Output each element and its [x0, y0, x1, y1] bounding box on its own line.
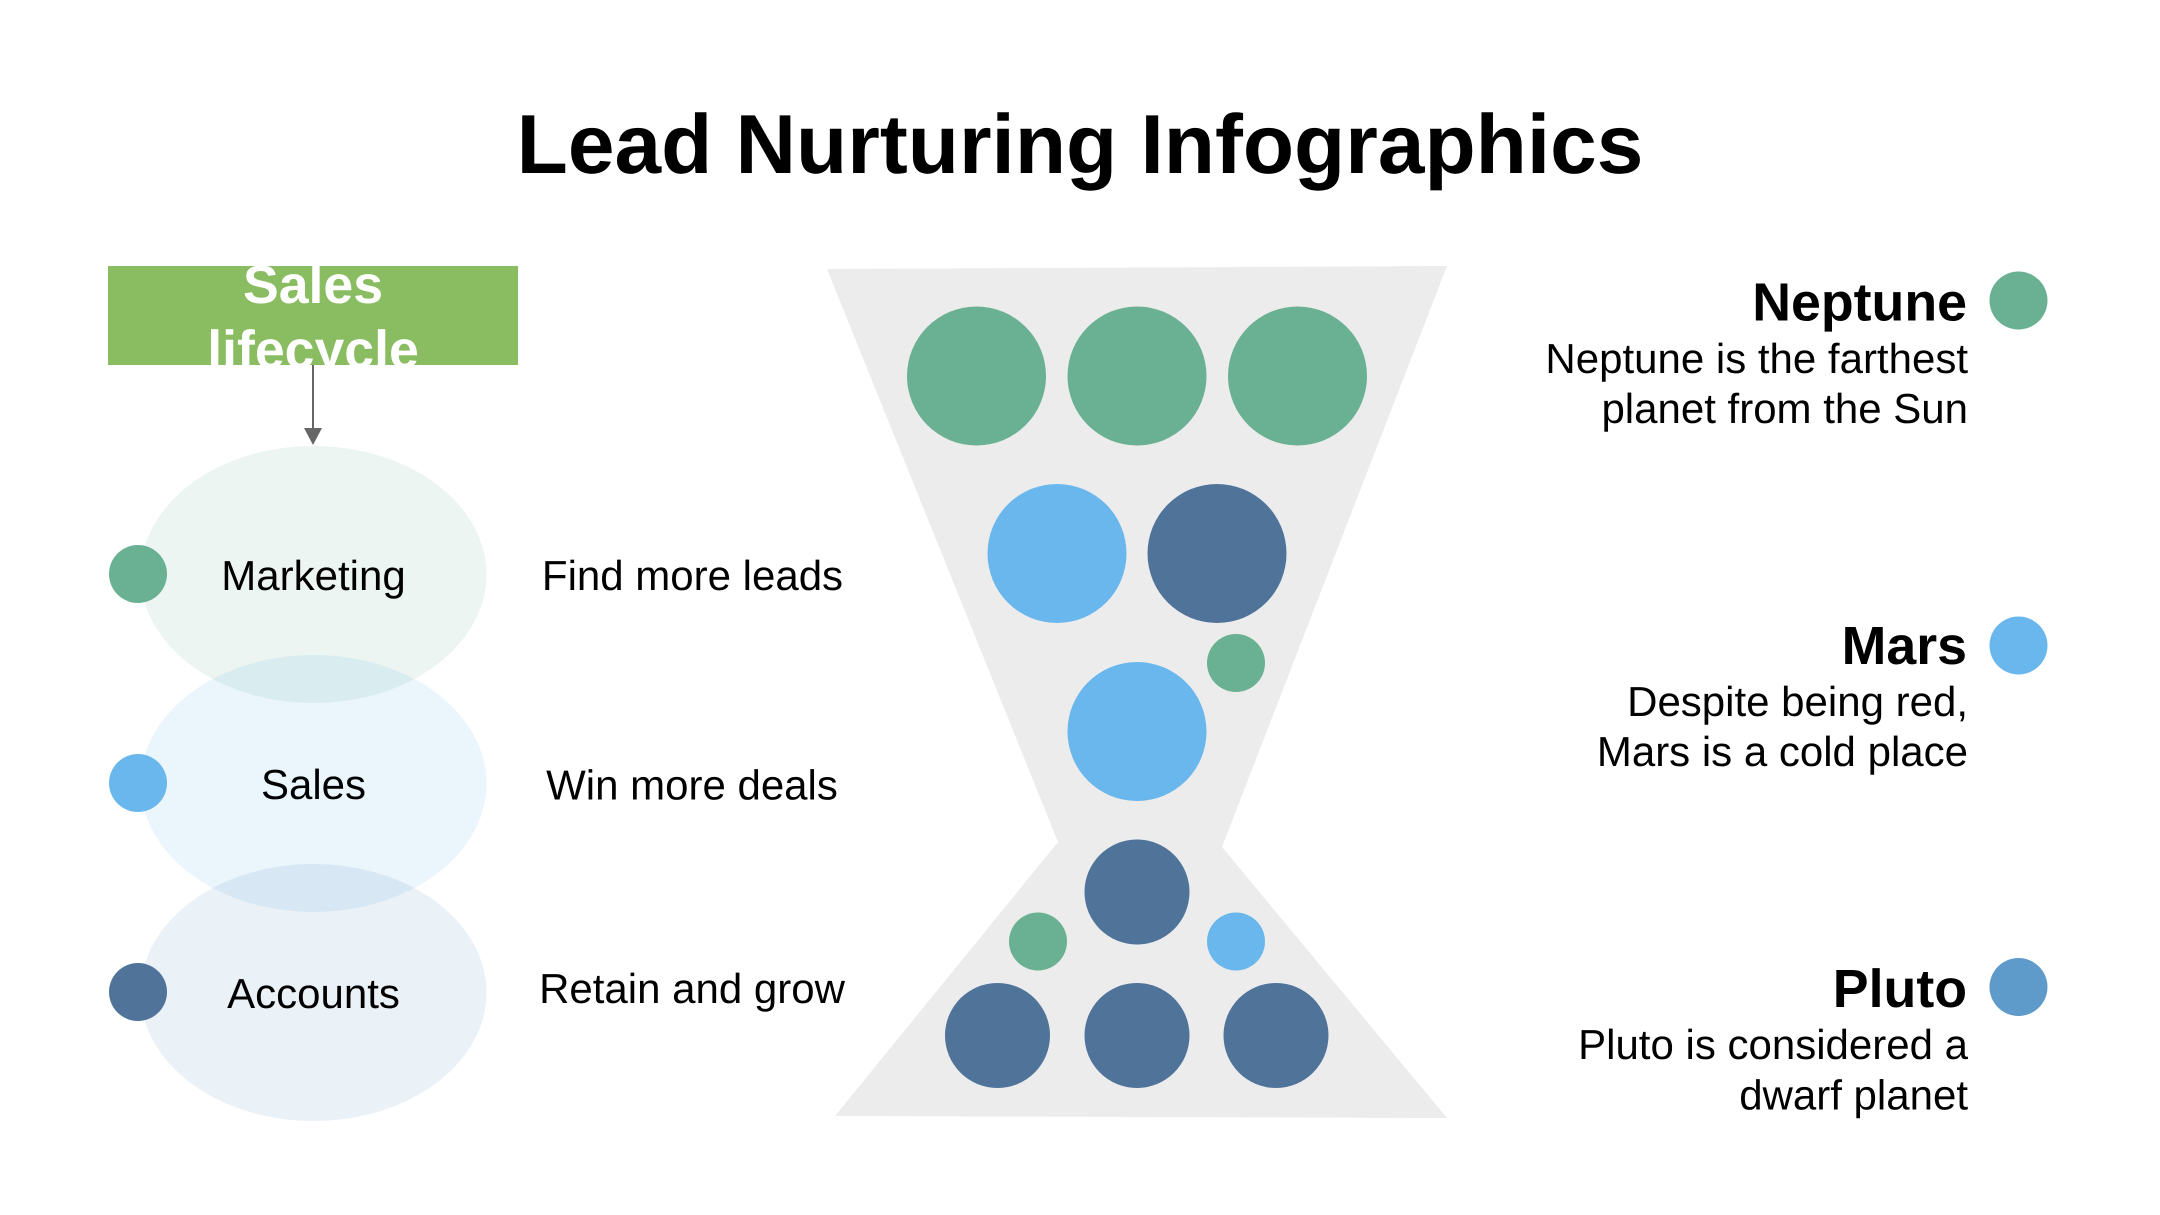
small green circle lower — [1009, 912, 1067, 970]
top navy circle in lower funnel — [1084, 840, 1190, 944]
row: blue and navy circles — [988, 484, 1286, 623]
heading box: Sales lifecycle — [108, 266, 518, 365]
arrow: lifecycle to marketing — [304, 365, 322, 445]
panel: Pluto — [1578, 958, 2048, 1118]
heading box: Sales lifecycle: lifecycle — [207, 320, 419, 380]
text: Retain and grow: Retain and grow — [539, 965, 846, 1012]
panel: Mars — [1597, 616, 2048, 775]
row: three navy circles — [945, 983, 1328, 1088]
panel: Mars: Despite being red, — [1627, 678, 1968, 725]
funnel shape — [827, 266, 1447, 1118]
panel: Pluto: Pluto — [1833, 959, 1967, 1019]
panel: Neptune — [1545, 272, 2048, 432]
stage: Sales — [109, 655, 486, 912]
panel: Neptune: Neptune — [1752, 272, 1967, 332]
row: three green circles — [907, 306, 1367, 446]
panel: sales lifecycle stages — [108, 255, 846, 1121]
small blue circle lower — [1207, 912, 1265, 970]
panel: Pluto: dwarf planet — [1739, 1072, 1968, 1118]
panel: Mars: Mars is a cold place — [1597, 728, 1968, 775]
panel: Mars: Mars — [1842, 616, 1967, 676]
stage: Sales: Sales — [261, 761, 366, 808]
small green circle — [1207, 634, 1265, 692]
title: Lead Nurturing Infographics — [517, 97, 1643, 191]
stage: Marketing — [109, 446, 486, 703]
stage: Accounts — [109, 864, 486, 1121]
large blue circle — [1068, 662, 1206, 801]
panel: Neptune: Neptune is the farthest — [1545, 335, 1968, 382]
chart: hourglass funnel — [827, 266, 1447, 1118]
stage: Accounts: Accounts — [227, 970, 400, 1017]
panel: Pluto: Pluto is considered a — [1578, 1021, 1969, 1068]
stage: Marketing: Marketing — [221, 552, 406, 599]
panel: Neptune: planet from the Sun — [1601, 385, 1968, 432]
text: Win more deals: Win more deals — [546, 762, 838, 808]
heading box: Sales lifecycle: Sales — [243, 255, 383, 315]
text: Find more leads: Find more leads — [542, 552, 843, 599]
